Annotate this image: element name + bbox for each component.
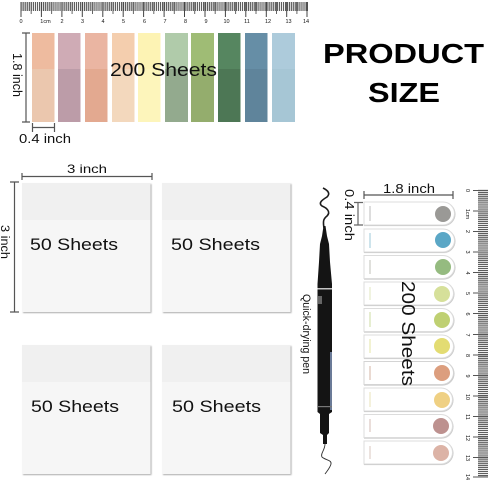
label: 200 Sheets (top): 200 Sheets — [110, 59, 217, 80]
right ruler: 2 — [464, 230, 470, 233]
pen label: Quick-drying pen — [300, 294, 312, 374]
title: product size: SIZE — [368, 77, 440, 108]
sticky note sheet 1 — [22, 183, 150, 312]
top ruler: 6 — [143, 19, 146, 25]
right ruler: 5 — [464, 292, 470, 295]
sticky note sheet 4 — [162, 345, 290, 474]
top ruler: 2 — [60, 19, 64, 25]
colour tab strips — [32, 33, 295, 122]
top ruler: 1cm — [40, 19, 51, 25]
top ruler: 9 — [204, 19, 208, 25]
tab 9 — [364, 414, 453, 438]
right ruler: 0 — [464, 189, 470, 192]
pen — [318, 188, 332, 474]
sticky note sheet 2 — [162, 183, 290, 312]
right ruler: 10 — [464, 394, 470, 400]
dimension: 0.4 inch width — [19, 123, 71, 146]
top ruler: 11 — [244, 19, 250, 25]
top ruler: 14 — [303, 19, 309, 25]
tab 1 — [364, 202, 454, 225]
sticky note sheet 1: 50 Sheets — [30, 236, 118, 254]
top ruler: 4 — [101, 19, 105, 25]
tab 8 — [364, 388, 453, 411]
tab 3 — [364, 256, 454, 278]
label: 200 Sheets (tabs): 200 Sheets — [398, 281, 419, 386]
tab 6 — [364, 335, 454, 358]
top ruler: 5 — [122, 19, 125, 25]
right ruler: 8 — [464, 354, 470, 357]
dimension: 0.4 inch pill height: 0.4 inch — [342, 189, 356, 241]
tab 10 — [364, 441, 453, 464]
dimension: 0.4 inch width: 0.4 inch — [19, 131, 71, 146]
right ruler: 11 — [464, 414, 470, 420]
tab 4 — [364, 282, 454, 305]
right ruler: 9 — [464, 374, 470, 378]
right ruler: 6 — [464, 312, 470, 316]
top ruler: 0 — [19, 19, 23, 25]
top ruler: 8 — [184, 19, 187, 25]
sticky note sheet 3 — [22, 345, 150, 474]
right ruler: 4 — [464, 271, 470, 275]
sticky note sheet 2: 50 Sheets — [171, 236, 260, 254]
tab 2 — [364, 229, 454, 252]
right ruler: 12 — [464, 435, 470, 441]
right ruler: 13 — [464, 455, 470, 461]
dimension: 3 inch height — [0, 182, 19, 312]
right ruler: 7 — [464, 333, 470, 337]
right ruler: 3 — [464, 250, 470, 254]
title: product size: PRODUCT — [323, 38, 484, 69]
tab 5 — [364, 308, 454, 332]
dimension: 1.8 inch height — [10, 33, 30, 122]
dimension: 1.8 inch height: 1.8 inch — [10, 53, 25, 97]
sticky note sheet 3: 50 Sheets — [31, 398, 119, 416]
top ruler: 10 — [223, 19, 230, 25]
dimension: 1.8 inch pill width — [364, 182, 453, 199]
top ruler: 12 — [265, 19, 271, 25]
top ruler — [19, 2, 309, 25]
top ruler: 3 — [81, 19, 84, 25]
tab 7 — [364, 362, 454, 384]
right ruler: 1cm — [464, 209, 470, 220]
title: product size — [323, 38, 484, 108]
dimension: 3 inch width — [22, 162, 152, 180]
right ruler: 14 — [464, 474, 470, 480]
top ruler: 13 — [285, 19, 292, 25]
dimension: 1.8 inch pill width: 1.8 inch — [383, 182, 435, 196]
top ruler: 7 — [163, 19, 167, 25]
index tabs — [364, 202, 454, 464]
dimension: 3 inch width: 3 inch — [67, 162, 107, 176]
right ruler — [464, 189, 488, 480]
dimension: 0.4 inch pill height — [342, 189, 363, 241]
sticky note sheet 4: 50 Sheets — [172, 398, 261, 416]
